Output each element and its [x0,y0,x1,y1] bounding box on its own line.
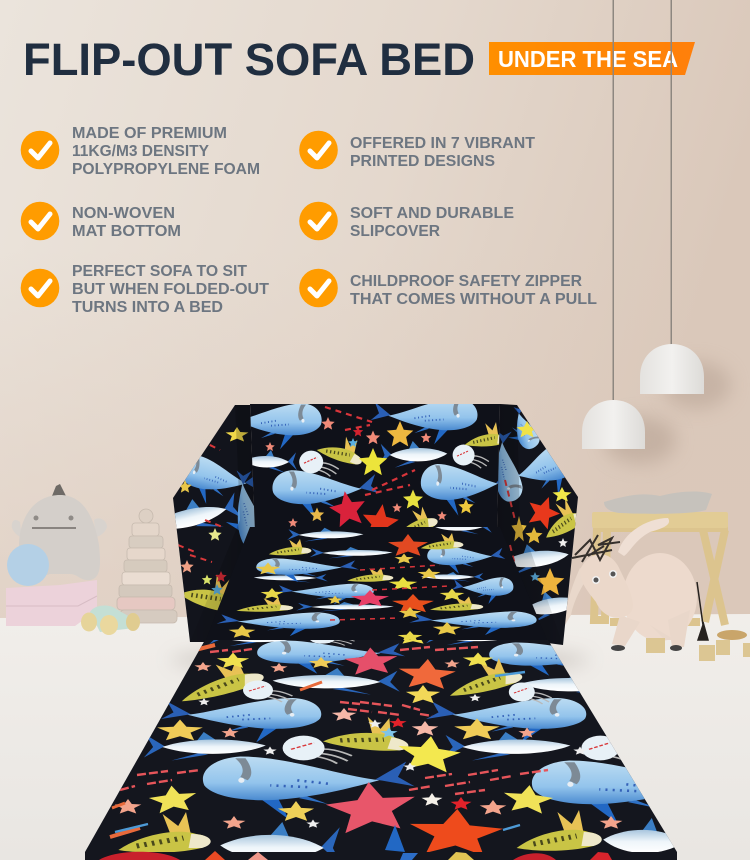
pendant lamps [582,0,731,464]
sofa right arm [497,404,578,645]
badge: under the sea: UNDER THE SEA [498,46,678,72]
feature list [21,125,597,316]
feature: printed designs: OFFERED IN 7 VIBRANT [350,135,535,152]
mat print: sharks [144,628,699,860]
feature: sofa to bed: TURNS INTO A BED [72,299,223,316]
floor shadow under sofa [170,646,590,674]
background wall [0,0,750,620]
side table and pillow [592,492,728,625]
feature: printed designs: PRINTED DESIGNS [350,153,495,170]
toy: pink gift box [6,580,97,626]
mat print: small red fish [120,647,548,794]
feature: premium foam: 11KG/M3 DENSITY [72,143,209,160]
mat front edge print [99,851,612,860]
backrest print: sharks and jellyfish [252,422,500,527]
toy: wooden car [81,606,140,635]
mat print: jellyfish [243,640,621,764]
donkey body [623,553,697,641]
feature: printed designs [299,131,535,170]
donkey ears [618,518,669,556]
sofa bed [85,404,677,860]
table top [592,512,728,528]
feature: sofa to bed: PERFECT SOFA TO SIT [72,263,247,280]
toy: blue ball [7,544,49,586]
feature: sofa to bed [21,263,269,316]
feature: safety zipper [299,269,597,308]
feature: sofa to bed: BUT WHEN FOLDED-OUT [72,281,269,298]
toys: left group [6,484,177,635]
feature: slipcover: SOFT AND DURABLE [350,205,514,222]
feature: premium foam: POLYPROPYLENE FOAM [72,161,260,178]
mat print: whales [161,640,650,824]
donkey head [580,554,633,618]
sofa backrest [250,404,500,527]
plush donkey [565,518,708,651]
table legs [594,528,728,625]
feature: safety zipper: THAT COMES WITHOUT A PULL [350,291,597,308]
donkey tail [697,582,708,640]
feature: mat bottom [21,202,181,240]
mat print [110,640,674,852]
pillow [604,492,712,514]
feature: premium foam: MADE OF PREMIUM [72,125,227,142]
feature: mat bottom: NON-WOVEN [72,205,175,222]
sofa seat [210,527,540,640]
wooden alphabet blocks [646,630,750,661]
title: FLIP-OUT SOFA BED [23,34,475,85]
mat print: starfish [115,631,622,857]
wall lower tone [0,250,750,620]
backrest print: whales [250,404,498,517]
toy: grey plush dinosaur [12,484,107,580]
sofa left arm [173,405,255,642]
mat print: turtles [118,621,602,853]
toy: stacking rings [117,509,177,623]
feature: premium foam [21,125,260,178]
donkey hair [572,535,620,562]
backrest print: starfish [265,417,474,527]
floor [0,614,750,860]
donkey legs [612,610,690,647]
feature: safety zipper: CHILDPROOF SAFETY ZIPPER [350,273,582,290]
feature: slipcover [299,202,514,240]
fold-out mat [85,640,677,860]
feature: mat bottom: MAT BOTTOM [72,223,181,240]
feature: slipcover: SLIPCOVER [350,223,440,240]
